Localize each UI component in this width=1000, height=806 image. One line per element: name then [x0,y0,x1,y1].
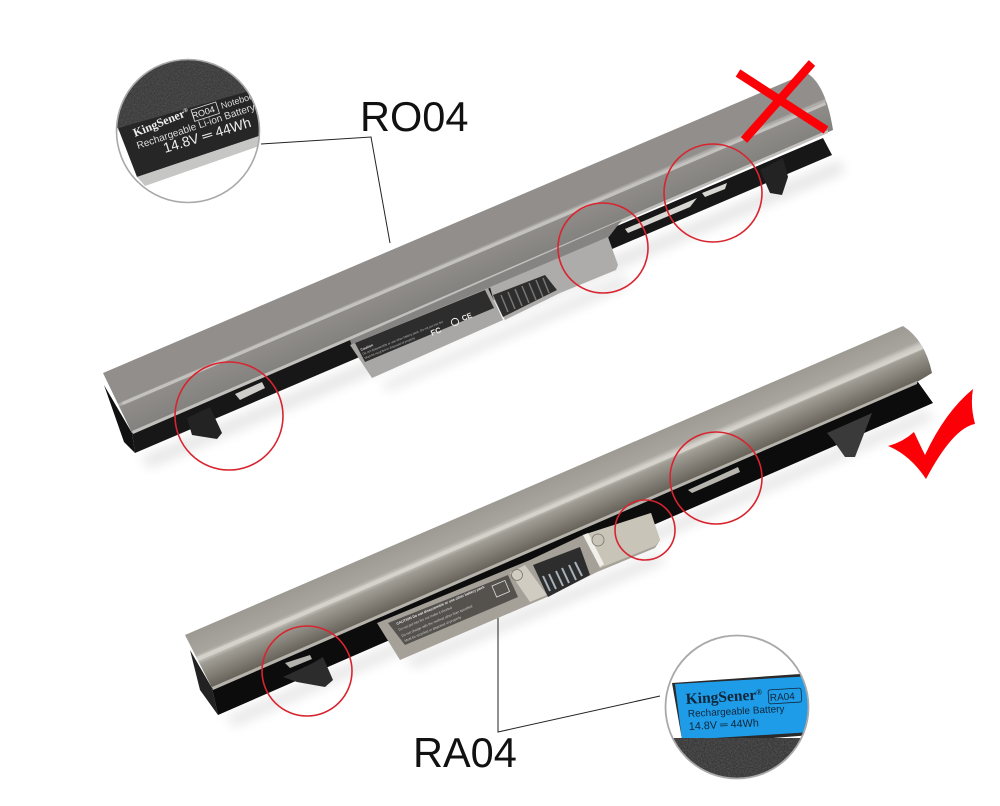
heading: RA04: RA04 [413,729,517,776]
leader line: RA04 [498,618,660,732]
leader line: RO04 [261,137,390,243]
red circle: RO04 right tab [664,144,762,242]
caution label module: Must be recycled or disposed of properly [404,615,462,643]
caution label module: FC [429,325,443,338]
callout: RA04 label close-up: ® [756,687,762,697]
callout: RO04 label close-up: RO04 [191,104,216,121]
caution label module [350,288,503,378]
latch: right [760,158,788,195]
caution label module: Caution [360,343,374,352]
metal contact block [490,237,618,320]
red check mark [888,389,975,479]
latch: right [827,413,872,457]
callout: RO04 label close-up: ® [182,106,190,115]
connector [533,547,590,597]
callout: RO04 label close-up: Rechargeable Li-ion Battery Pack [135,94,281,152]
callout: RO04 label close-up: KingSener [131,106,187,140]
heading: RO04: RO04 [360,93,468,140]
battery: RA04 (correct) [185,326,935,726]
callout: RO04 label close-up [116,58,260,204]
callout: RA04 label close-up: KingSener [685,687,757,708]
metal contact block [377,513,660,660]
caution label module: CAUTION Do not disassemble or use other battery pack [396,585,485,626]
callout: RA04 label close-up: RA04 [770,691,796,704]
red circle: RO04 contact block [558,203,648,293]
caution label module [388,575,518,645]
red circle: RA04 contact block [615,500,675,560]
red circle: RA04 left latch [262,626,352,716]
front tab: right [688,467,740,493]
battery: RO04 (incorrect) [103,73,845,468]
callout: RA04 label close-up: 14.8V ═ 44Wh [689,717,759,733]
sticker strip [625,198,697,233]
caution label module: Do not disassemble or use other battery pack. Do not put into fire [362,320,444,356]
caution label module: Must be recycled or disposed of properly [364,336,416,360]
infographic canvas [103,58,975,780]
latch: left [283,657,333,687]
callout: RA04 label close-up [665,635,812,782]
connector [493,275,557,317]
red circle: RO04 left latch [175,362,283,470]
caution label module: Do not put into fire nor make it shorted [398,606,453,632]
callout: RA04 label close-up: Rechargeable Battery [688,704,785,720]
front tab: right [702,183,727,197]
latch: left [187,407,222,439]
silver fill above module [350,220,622,346]
callout: RO04 label close-up: Notebook [220,89,260,111]
red X mark [738,63,826,140]
front tab: left [285,655,312,668]
callout: RO04 label close-up: 14.8V ═ 44Wh [161,114,253,156]
front tab: left [235,382,265,400]
caution label module: Do not charge with the method other than specified [401,604,473,638]
red circle: RA04 right tab [670,432,762,524]
caution label module: CE [460,311,473,323]
